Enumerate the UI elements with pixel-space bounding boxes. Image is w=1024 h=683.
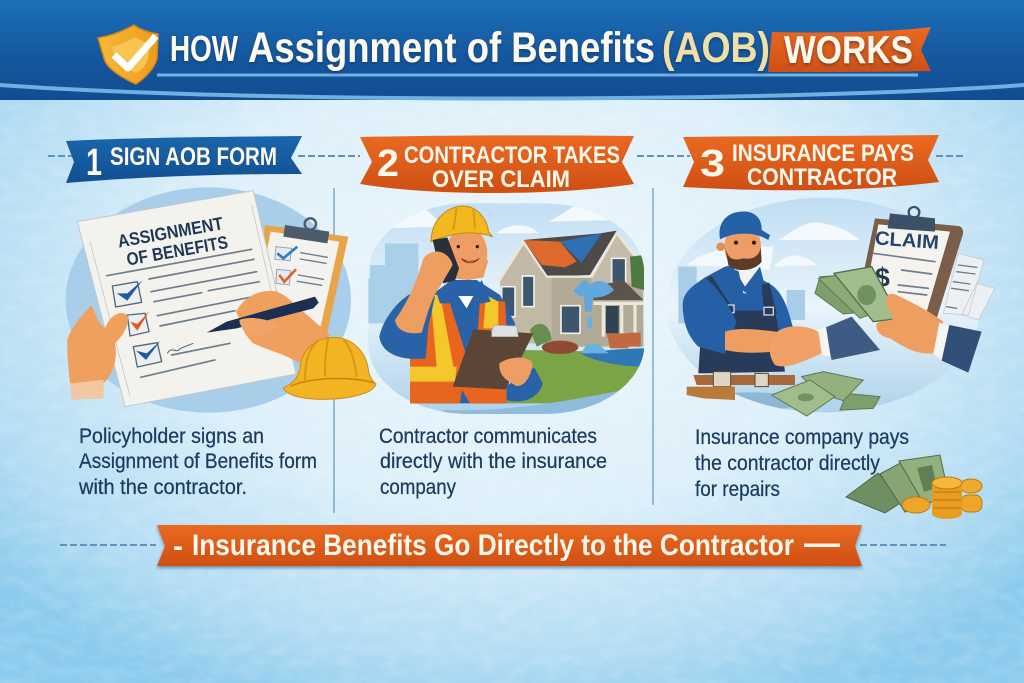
- text: step 2 description: Contractor communicates: [379, 425, 597, 448]
- clouds: [392, 206, 610, 234]
- text: step 3 description: for repairs: [695, 478, 780, 501]
- icon: shield with check: [98, 25, 158, 84]
- icon: cash and coins: [846, 455, 982, 519]
- illustration: signing the form: ASSIGNMENT: [116, 213, 225, 252]
- column dividers: [334, 188, 653, 513]
- bottom banner: -: [173, 530, 183, 563]
- banner: step 3: [683, 135, 939, 191]
- title: Assignment of Benefits: [248, 24, 655, 72]
- banner: step 2: CONTRACTOR TAKES: [404, 142, 620, 169]
- claim clipboard: $: [875, 263, 890, 293]
- text: step 1 description: with the contractor.: [78, 476, 247, 499]
- claim clipboard: CLAIM: [874, 228, 940, 254]
- lawn: [507, 350, 647, 403]
- contractor in overalls: [683, 211, 795, 400]
- text: step 2 description: directly with the insurance: [380, 450, 607, 473]
- banner: step 3: 3: [700, 143, 725, 185]
- text: step 1 description: Assignment of Benefits form: [79, 450, 317, 473]
- text: step 2 description: [379, 425, 607, 499]
- skyline and clouds: [678, 267, 805, 323]
- illustration: insurance payment handshake: [671, 198, 996, 417]
- bottom banner: Insurance Benefits Go Directly to the Contractor: [192, 529, 794, 562]
- header band: [0, 0, 1024, 100]
- banner: step 2: 2: [377, 143, 399, 185]
- banner: step 3: CONTRACTOR: [747, 164, 897, 191]
- banner: step 1: [66, 136, 302, 184]
- claim clipboard: [855, 207, 995, 320]
- step connectors: [48, 156, 966, 545]
- cash and paying hand: [772, 267, 982, 416]
- title: HOW: [170, 28, 238, 69]
- banner: step 2: OVER CLAIM: [432, 166, 570, 193]
- illustration: contractor and damaged house: [368, 203, 644, 414]
- text: step 3 description: Insurance company pays: [695, 426, 909, 449]
- banner: step 2: [360, 135, 634, 193]
- text: step 1 description: [78, 425, 317, 499]
- banner: step 3: INSURANCE PAYS: [732, 140, 914, 167]
- banner: step 1: 1: [86, 142, 102, 184]
- illustration: signing the form: [66, 187, 376, 413]
- illustration: signing the form: OF BENEFITS: [125, 232, 230, 270]
- title: (AOB): [662, 24, 770, 72]
- banner: step 1: SIGN AOB FORM: [110, 143, 277, 171]
- handshake and sleeve: [770, 317, 880, 366]
- man on phone: [379, 206, 543, 403]
- city skyline: [363, 243, 418, 323]
- text: step 3 description: the contractor directly: [695, 452, 880, 475]
- title banner: works: WORKS: [784, 29, 913, 72]
- text: step 1 description: Policyholder signs an: [79, 425, 264, 448]
- house: [498, 231, 644, 354]
- text: step 2 description: company: [380, 476, 456, 499]
- text: step 3 description: [695, 426, 909, 501]
